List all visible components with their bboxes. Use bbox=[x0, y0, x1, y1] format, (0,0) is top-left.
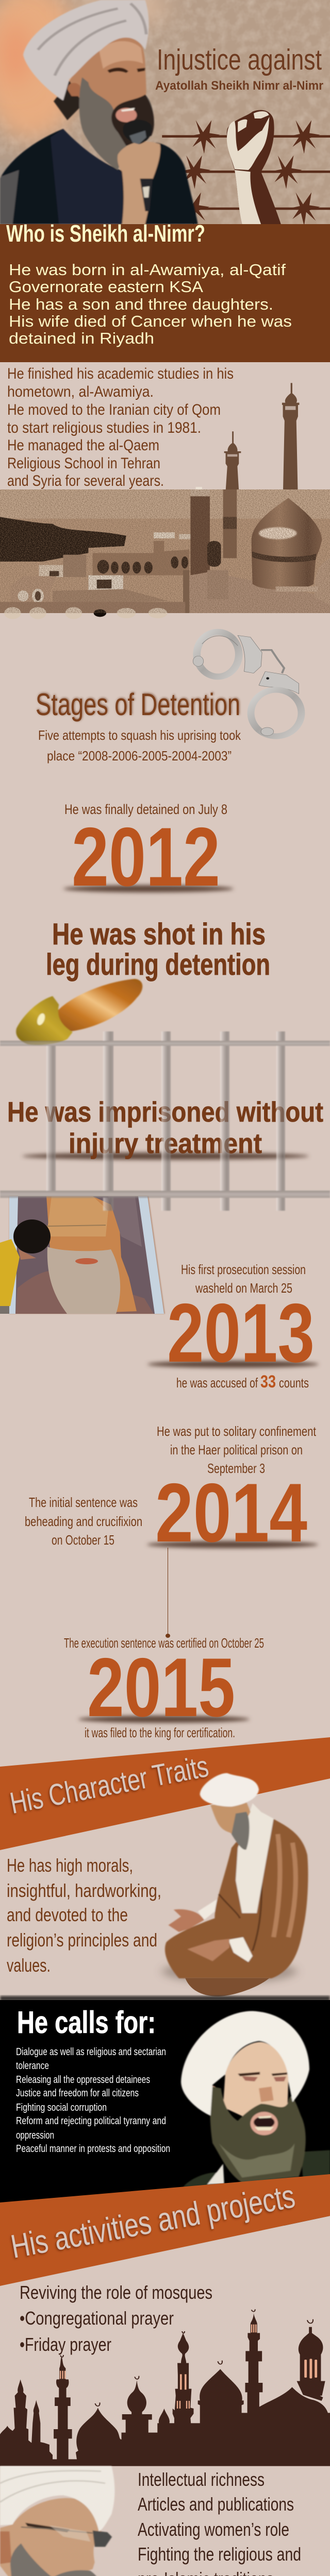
towers bbox=[190, 495, 210, 577]
text: character traits: values. bbox=[7, 1955, 51, 1976]
turban bbox=[200, 1773, 259, 1807]
text: reviving the role of mosques: •Friday prayer bbox=[20, 2334, 111, 2355]
heading: he calls for: He calls for: bbox=[17, 2005, 156, 2040]
text: intellectual activities bbox=[138, 2469, 301, 2576]
text: character traits: He has high morals, bbox=[7, 1855, 133, 1876]
biography text: He has a son and three daughters. bbox=[9, 295, 273, 313]
text: initial sentence: beheading and crucifixion bbox=[25, 1514, 142, 1529]
robe bbox=[165, 1812, 308, 1978]
text: initial sentence: on October 15 bbox=[52, 1532, 114, 1548]
list of demands: Peaceful manner in protests and opposition bbox=[16, 2143, 170, 2155]
text: accused of 33 counts: he was accused of bbox=[176, 1375, 258, 1391]
text: filed to the king: it was filed to the king for certification. bbox=[85, 1725, 235, 1740]
text: character traits bbox=[7, 1855, 161, 1976]
illustration: mosque skyline silhouette bbox=[0, 2309, 330, 2466]
text: studies: hometown, al-Awamiya. bbox=[7, 383, 154, 400]
text: first prosecution session bbox=[181, 1262, 306, 1296]
text: initial sentence bbox=[25, 1495, 142, 1548]
text: intellectual activities: Activating women’s role bbox=[138, 2519, 289, 2540]
text: finally detained: He was finally detained on July 8 bbox=[64, 802, 227, 817]
far bright houses bbox=[154, 532, 175, 538]
illustration: praying sheikh bbox=[162, 1773, 308, 1996]
panel: he calls for bbox=[0, 1996, 330, 2226]
face bbox=[0, 2498, 101, 2576]
dark trees bbox=[0, 517, 126, 562]
text: solitary confinement bbox=[157, 1423, 317, 1476]
text: studies: Religious School in Tehran bbox=[7, 455, 160, 472]
banner: his character traits bbox=[0, 1737, 330, 1850]
list of demands bbox=[16, 2046, 170, 2155]
heading: imprisoned bbox=[7, 1096, 323, 1159]
text: five attempts: Five attempts to squash his uprising took bbox=[38, 727, 241, 743]
lower arcade bbox=[0, 602, 185, 613]
illustration: sheikh speaking into microphone bbox=[0, 0, 198, 224]
text: studies: He finished his academic studies in his bbox=[7, 365, 234, 382]
list of demands: Justice and freedom for all citizens bbox=[16, 2088, 139, 2099]
text: initial sentence: The initial sentence was bbox=[29, 1495, 138, 1510]
icon: bullet bbox=[16, 979, 142, 1045]
panel: who is Sheikh al-Nimr bbox=[0, 220, 330, 362]
text: reviving the role of mosques: •Congregational prayer bbox=[20, 2308, 174, 2329]
area below activities banner bbox=[0, 2216, 330, 2287]
poster figure bbox=[15, 1270, 154, 1314]
text: character traits: insightful, hardworking, bbox=[7, 1880, 161, 1901]
image: sepia shrine skyline bbox=[0, 383, 330, 619]
text: solitary confinement: September 3 bbox=[207, 1461, 265, 1476]
text: character traits: and devoted to the bbox=[7, 1904, 128, 1925]
text: studies: He moved to the Iranian city of Qom bbox=[7, 401, 221, 418]
minarets above horizon bbox=[196, 383, 299, 495]
list of demands: Dialogue as well as religious and sectarian bbox=[16, 2046, 166, 2058]
hair bbox=[54, 81, 84, 120]
biography text: His wife died of Cancer when he was bbox=[9, 312, 292, 330]
title: Ayatollah Sheikh Nimr al-Nimr bbox=[155, 79, 323, 93]
face bbox=[210, 1802, 251, 1838]
banner: his character traits: His Character Traits bbox=[7, 1750, 211, 1820]
list of demands: Releasing all the oppressed detainees bbox=[16, 2074, 150, 2086]
prison bars with imprisoned text bbox=[0, 1031, 330, 1211]
hands and sleeves bbox=[198, 1900, 217, 1920]
title bbox=[155, 43, 323, 93]
text: studies bbox=[7, 365, 234, 489]
heading: shot in leg bbox=[46, 918, 270, 981]
text: first prosecution session: washeld on March 25 bbox=[195, 1280, 292, 1296]
illustration: barbed wire and raised fist bbox=[162, 110, 330, 226]
text: reviving the role of mosques: Reviving the role of mosques bbox=[20, 2282, 212, 2303]
biography text: detained in Riyadh bbox=[9, 329, 154, 347]
dome bbox=[252, 498, 322, 590]
icon: handcuffs bbox=[193, 632, 301, 736]
text: accused of 33 counts bbox=[176, 1372, 309, 1392]
text: accused of 33 counts: counts bbox=[279, 1375, 309, 1391]
beard bbox=[232, 1812, 250, 1850]
glasses bbox=[21, 2527, 93, 2533]
text: character traits: religion’s principles and bbox=[7, 1929, 157, 1951]
white houses bbox=[39, 565, 63, 577]
beard bbox=[10, 2544, 106, 2576]
text: reviving the role of mosques bbox=[20, 2282, 212, 2355]
beard bbox=[79, 77, 154, 170]
list of demands: tolerance bbox=[16, 2060, 49, 2072]
text: studies: He managed the al-Qaem bbox=[7, 437, 159, 454]
shadow bbox=[22, 1153, 309, 1160]
mosque wall with arches bbox=[93, 541, 189, 575]
robe bbox=[0, 129, 198, 224]
mouth bbox=[116, 108, 137, 122]
heading: stages of detention: Stages of Detention bbox=[36, 687, 240, 722]
hand and microphone bbox=[118, 142, 160, 224]
timeline connector bbox=[166, 1548, 170, 1638]
heading: imprisoned: injury treatment bbox=[69, 1127, 262, 1159]
heading: who is: Who is Sheikh al-Nimr? bbox=[6, 220, 205, 247]
scarf bbox=[236, 1803, 274, 1913]
biography text bbox=[9, 261, 292, 347]
bars bbox=[0, 1031, 330, 1211]
list of demands: Fighting social corruption bbox=[16, 2102, 107, 2113]
illustration: sheikh with glasses and microphones bbox=[0, 2466, 234, 2576]
text: accused of 33 counts: 33 bbox=[260, 1372, 276, 1392]
year 2012: 2012 bbox=[72, 810, 220, 904]
text: studies: and Syria for several years. bbox=[7, 472, 164, 489]
biography text: Governorate eastern KSA bbox=[9, 278, 203, 296]
list of demands: Reform and rejecting political tyranny and bbox=[16, 2115, 166, 2127]
hero panel bbox=[0, 0, 330, 242]
text: five attempts: place “2008-2006-2005-2004-2003” bbox=[47, 748, 232, 764]
list of demands: oppression bbox=[16, 2130, 54, 2141]
text: five attempts bbox=[38, 727, 241, 764]
text: studies: to start religious studies in 1981. bbox=[7, 419, 201, 436]
illustration: sheikh portrait shouting bbox=[181, 2011, 330, 2187]
image: poster of the sheikh bbox=[0, 1196, 165, 1314]
heading: shot in leg: leg during detention bbox=[46, 948, 270, 981]
turban bbox=[23, 0, 149, 100]
courtyard bbox=[189, 572, 330, 613]
heading: shot in leg: He was shot in his bbox=[52, 918, 266, 951]
boy in yellow shirt bbox=[13, 1219, 51, 1253]
face bbox=[70, 32, 146, 117]
text: intellectual activities: Intellectual richness bbox=[138, 2469, 265, 2490]
turban bbox=[0, 2466, 114, 2531]
year 2015: 2015 bbox=[87, 1641, 235, 1734]
biography text: He was born in al-Awamiya, al-Qatif bbox=[9, 261, 286, 279]
